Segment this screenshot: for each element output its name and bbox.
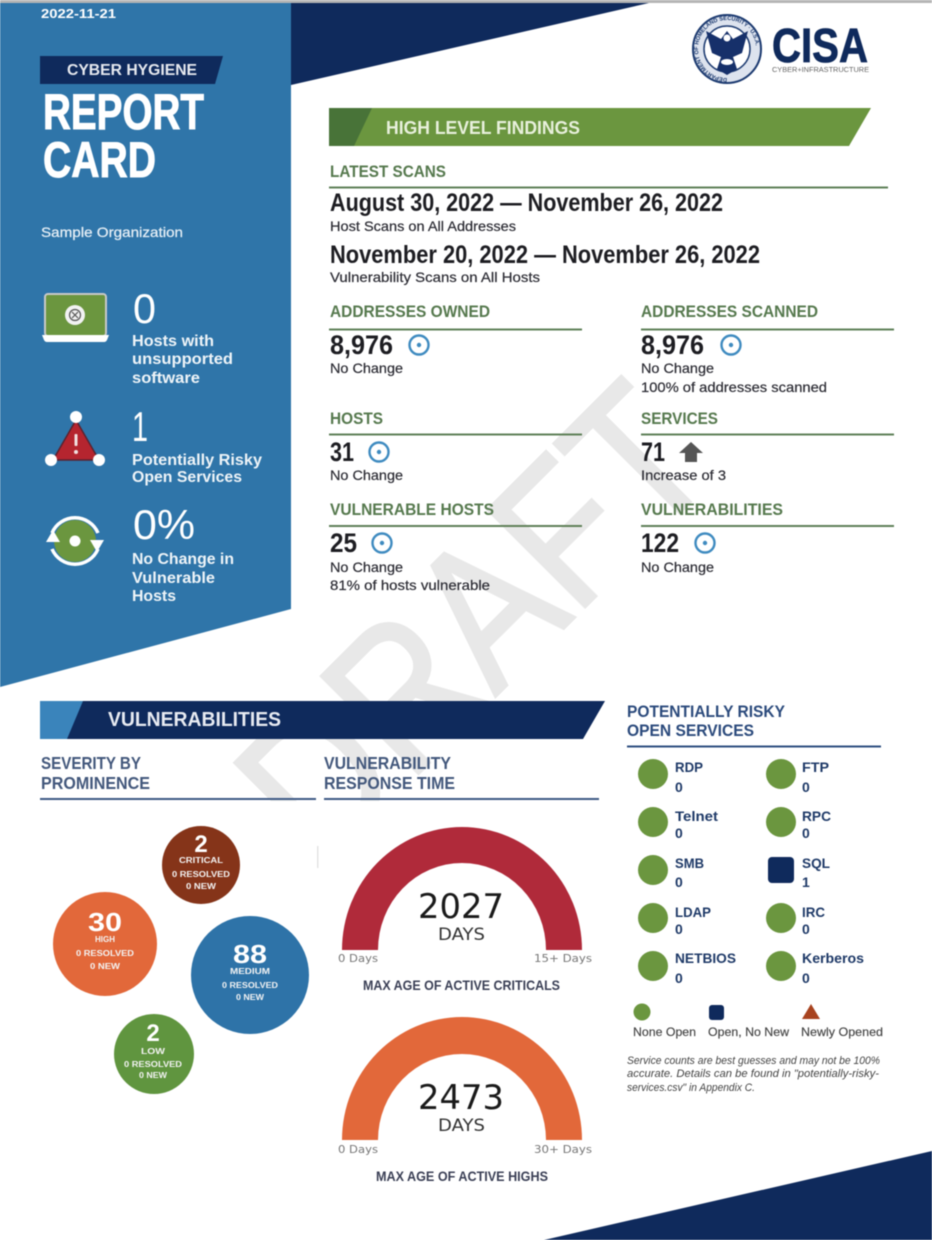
bubble: high: HIGH: [95, 935, 115, 944]
tag: cyber hygiene: [40, 56, 223, 84]
logo: DHS seal and CISA: [691, 13, 870, 85]
stat: unsupported software: Hosts with: [132, 333, 214, 350]
stat: vulnerable hosts: VULNERABLE HOSTS: [330, 500, 494, 519]
gauge: max age of active criticals: DAYS: [438, 925, 485, 945]
heading: high level findings: HIGH LEVEL FINDINGS: [386, 118, 580, 138]
heading: severity by prominence: [40, 753, 316, 800]
gauge: max age of active criticals: [338, 827, 592, 993]
bubble: medium: 0 RESOLVED: [222, 981, 278, 990]
heading: risky services: [627, 702, 881, 748]
stat: addresses scanned: [641, 302, 894, 395]
service: FTP: 0: [802, 779, 810, 795]
bubble: critical: [162, 826, 240, 904]
stat: services: SERVICES: [641, 409, 718, 428]
service: FTP: [766, 759, 829, 795]
heading: severity by prominence: SEVERITY BY: [41, 753, 141, 773]
bubble: critical: 2: [194, 831, 208, 858]
legend: [633, 1004, 883, 1039]
stat: risky services: 1: [132, 403, 148, 450]
bubble: low: [114, 1014, 194, 1094]
service: SQL: 1: [802, 874, 810, 890]
stat: hosts: HOSTS: [330, 409, 383, 428]
gauge: max age of active highs: DAYS: [438, 1116, 485, 1136]
gauge: max age of active criticals: 15+ Days: [534, 952, 592, 965]
stat: vulnerable hosts change: [132, 501, 234, 605]
bubble: medium: [191, 916, 309, 1034]
stat: hosts: No Change: [330, 467, 403, 483]
service: LDAP: LDAP: [675, 904, 711, 920]
footnote: Service counts are best guesses and may not be 100%: [627, 1055, 880, 1067]
icon: laptop: [42, 294, 109, 342]
gauge: max age of active highs: 0 Days: [338, 1143, 378, 1156]
stat: addresses scanned: No Change: [641, 360, 714, 376]
service: RDP: 0: [675, 779, 683, 795]
stat: vulnerable hosts change: Hosts: [132, 588, 176, 605]
heading: vulnerability response time: RESPONSE TIME: [324, 773, 455, 793]
gauge: max age of active highs: 2473: [418, 1078, 504, 1118]
bubble: medium: MEDIUM: [230, 967, 270, 976]
stat: vulnerable hosts: No Change: [330, 559, 403, 575]
bubble: low: 0 RESOLVED: [124, 1060, 182, 1069]
panel: potentially risky open services: [627, 702, 883, 1094]
service: IRC: [766, 903, 825, 937]
bubble: low: 2: [146, 1020, 160, 1047]
block: latest scans: Vulnerability Scans on All Hosts: [330, 269, 540, 285]
stat: vulnerabilities: [641, 500, 894, 575]
stat: unsupported software: software: [132, 370, 200, 387]
stat: vulnerabilities: No Change: [641, 559, 714, 575]
block: latest scans: Host Scans on All Addresses: [330, 218, 516, 234]
stat: hosts: [329, 409, 582, 483]
gauge: max age of active criticals: MAX AGE OF ACTIVE CRITICALS: [363, 977, 560, 993]
legend: Open, No New: [708, 1025, 789, 1039]
block: latest scans: LATEST SCANS: [330, 162, 446, 181]
service: Kerberos: 0: [802, 970, 810, 986]
bubble: critical: 0 NEW: [186, 882, 217, 891]
service: SQL: SQL: [802, 855, 830, 871]
heading: vulnerabilities: [40, 701, 605, 739]
service: RDP: [638, 759, 703, 795]
service: NETBIOS: NETBIOS: [675, 950, 736, 966]
service: IRC: 0: [802, 921, 810, 937]
service: SQL: [768, 855, 830, 890]
logo: DHS seal and CISA: CISA: [772, 20, 868, 73]
heading: vulnerability response time: VULNERABILITY: [324, 753, 451, 773]
panel: report card sidebar: [0, 3, 291, 687]
service: RPC: 0: [802, 825, 810, 841]
footnote: accurate. Details can be found in "potentially-risky-: [627, 1068, 879, 1080]
stat: services: [641, 409, 894, 483]
bubble: medium: 88: [233, 939, 267, 969]
bubble: high: 0 NEW: [90, 962, 121, 971]
navy corner bottom: [544, 1151, 932, 1240]
bubble: medium: 0 NEW: [236, 993, 264, 1002]
stat: vulnerable hosts: [329, 500, 582, 593]
block: latest scans: November 20, 2022 — November 26, 2022: [330, 241, 760, 269]
heading: severity by prominence: PROMINENCE: [41, 773, 150, 793]
block: latest scans: [329, 162, 888, 285]
service: Telnet: Telnet: [675, 808, 718, 824]
stat: services: Increase of 3: [641, 467, 726, 483]
bubble: high: 0 RESOLVED: [76, 949, 134, 958]
service: NETBIOS: [638, 950, 736, 986]
stat: risky services: Open Services: [132, 469, 242, 486]
icon: risk triangle: [45, 411, 105, 466]
service: IRC: IRC: [802, 904, 825, 920]
stat: unsupported software: 0: [133, 285, 156, 332]
bubble: critical: 0 RESOLVED: [172, 870, 230, 879]
gauge: max age of active criticals: 0 Days: [338, 952, 378, 965]
stat: vulnerable hosts: 81% of hosts vulnerable: [330, 577, 490, 593]
service: RDP: RDP: [675, 759, 703, 775]
service: Telnet: [638, 807, 718, 841]
footnote: [627, 1055, 880, 1094]
service: NETBIOS: 0: [675, 970, 683, 986]
stat: vulnerabilities: 122: [641, 528, 679, 558]
legend: None Open: [633, 1025, 696, 1039]
stat: addresses scanned: 100% of addresses scanned: [641, 379, 827, 395]
bubble: high: [53, 892, 157, 996]
title: CARD: [43, 132, 156, 188]
service: SMB: SMB: [675, 855, 704, 871]
service: RPC: [766, 807, 831, 841]
bubble chart: severity: [53, 826, 309, 1094]
title: REPORT: [43, 84, 204, 140]
legend: Newly Opened: [801, 1025, 883, 1039]
service: Kerberos: [766, 950, 864, 986]
organization name: Sample Organization: [41, 224, 183, 240]
service: FTP: FTP: [802, 759, 829, 775]
stat: vulnerable hosts: 25: [330, 528, 357, 558]
service: LDAP: [638, 903, 711, 937]
service: Telnet: 0: [675, 825, 683, 841]
stat: addresses owned: [329, 302, 582, 376]
gauge: max age of active highs: [338, 1017, 592, 1184]
icon: up arrow: [679, 442, 703, 462]
heading: risky services: OPEN SERVICES: [627, 721, 754, 740]
stat: risky services: [132, 403, 262, 486]
stat: addresses scanned: ADDRESSES SCANNED: [641, 302, 818, 321]
gauge: max age of active highs: 30+ Days: [534, 1143, 592, 1156]
stat: vulnerable hosts change: 0%: [133, 501, 195, 548]
stat: services: 71: [641, 437, 665, 467]
stat: unsupported software: [132, 285, 233, 387]
stat: vulnerable hosts change: No Change in: [132, 551, 234, 568]
stat: vulnerabilities: VULNERABILITIES: [641, 500, 783, 519]
service: SMB: 0: [675, 874, 683, 890]
bubble: high: 30: [88, 907, 122, 937]
block: latest scans: August 30, 2022 — November 26, 2022: [330, 189, 723, 217]
service: SMB: [638, 855, 704, 890]
report date: 2022-11-21: [41, 6, 116, 21]
title: [43, 84, 204, 188]
service: LDAP: 0: [675, 921, 683, 937]
heading: vulnerability response time: [324, 753, 599, 800]
service: Kerberos: Kerberos: [802, 950, 864, 966]
heading: risky services: POTENTIALLY RISKY: [627, 702, 786, 721]
stat: addresses owned: No Change: [330, 360, 403, 376]
logo: DHS seal and CISA: DEPARTMENT OF HOMELAND SECURITY · U.S.A.: [693, 15, 760, 83]
stat: addresses scanned: 8,976: [641, 330, 704, 360]
gauge: max age of active highs: MAX AGE OF ACTIVE HIGHS: [376, 1168, 548, 1184]
footnote: services.csv" in Appendix C.: [627, 1082, 755, 1094]
bubble: low: 0 NEW: [139, 1071, 167, 1080]
stat: risky services: Potentially Risky: [132, 452, 262, 469]
stat: addresses owned: 8,976: [330, 330, 393, 360]
heading: high level findings: [329, 108, 871, 146]
logo: DHS seal and CISA: CYBER+INFRASTRUCTURE: [772, 67, 869, 74]
stat: addresses owned: ADDRESSES OWNED: [330, 302, 490, 321]
stat: hosts: 31: [330, 437, 354, 467]
bubble: low: LOW: [141, 1047, 166, 1056]
heading: vulnerabilities: VULNERABILITIES: [108, 709, 281, 731]
bubble: critical: CRITICAL: [179, 856, 223, 865]
service: RPC: RPC: [802, 808, 831, 824]
stat: unsupported software: unsupported: [132, 351, 233, 368]
navy corner top: [291, 3, 649, 85]
stat: vulnerable hosts change: Vulnerable: [132, 570, 215, 587]
watermark: DRAFT: DRAFT: [195, 343, 752, 900]
icon: cycle: [46, 518, 104, 564]
gauge: max age of active criticals: 2027: [418, 887, 504, 927]
tag: cyber hygiene: CYBER HYGIENE: [67, 62, 197, 79]
